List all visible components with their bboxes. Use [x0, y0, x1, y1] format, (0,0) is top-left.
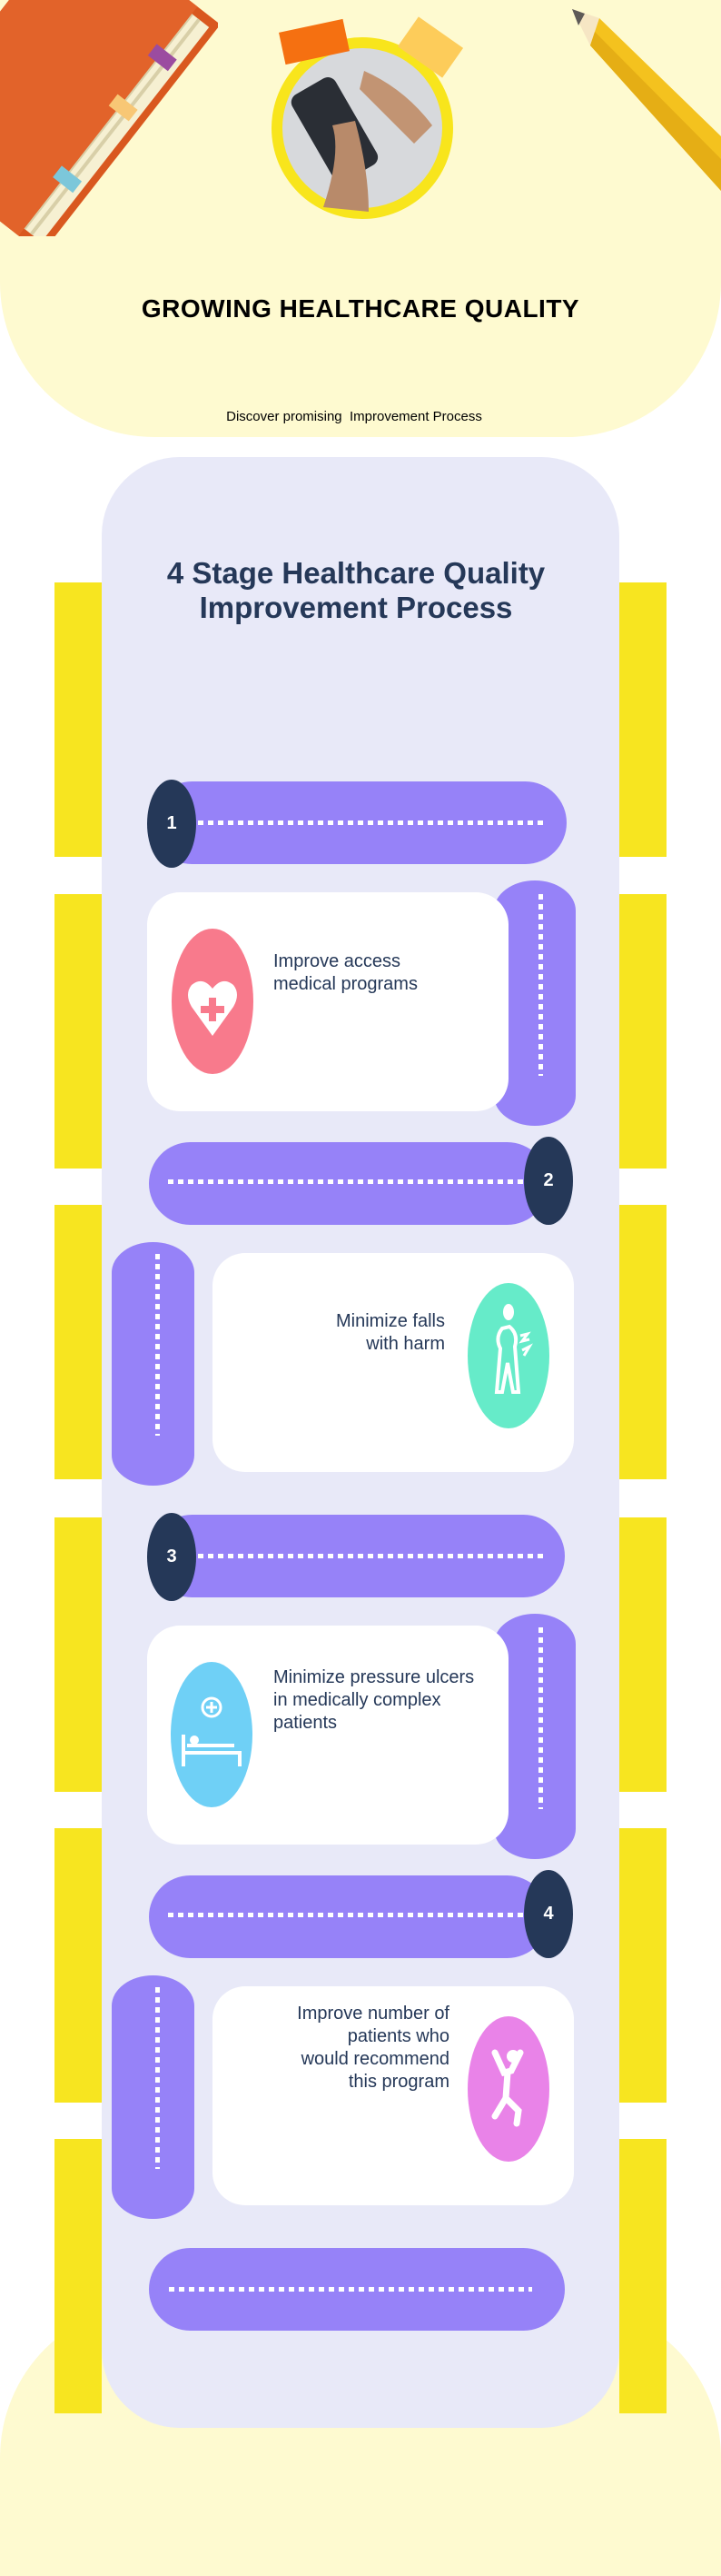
text 3: in medically complex [273, 1690, 441, 1710]
number 3 [147, 1513, 196, 1601]
icon: hurt person [468, 1283, 549, 1428]
card 2 [212, 1253, 574, 1472]
card 1 [147, 892, 509, 1111]
text 4: this program [349, 2072, 449, 2092]
footer background [0, 2303, 721, 2576]
tape pieces [279, 19, 350, 65]
bar 2 [149, 1142, 548, 1225]
panel heading [167, 556, 545, 624]
bar 4 [149, 1875, 548, 1958]
number 1 [147, 780, 196, 868]
stage 3 [147, 1513, 576, 1859]
capsule right [494, 1614, 576, 1859]
number 2: 2 [543, 1170, 554, 1190]
text 3 [273, 1667, 474, 1733]
stage 2 [112, 1137, 574, 1486]
text 1: Improve access [273, 951, 400, 971]
text 2 [336, 1311, 445, 1354]
text 1 [273, 951, 418, 994]
card 4 [212, 1986, 574, 2205]
illustration: pencil [572, 9, 721, 191]
text 2: Minimize falls [336, 1311, 445, 1331]
title: GROWING HEALTHCARE QUALITY [142, 294, 579, 323]
number 4: 4 [543, 1904, 554, 1924]
card 3 [147, 1626, 509, 1845]
number 3: 3 [166, 1547, 177, 1566]
text 4 [297, 2004, 449, 2092]
final bar [149, 2248, 565, 2331]
text 3: Minimize pressure ulcers [273, 1667, 474, 1687]
illustration: photo circle [272, 37, 453, 219]
number 1: 1 [166, 813, 177, 833]
bar 1 [151, 781, 567, 864]
capsule left [112, 1975, 194, 2219]
icon: heart [172, 929, 253, 1074]
subtitle: Discover promising Improvement Process [226, 409, 482, 424]
text 1: medical programs [273, 974, 418, 994]
text 4: Improve number of [297, 2004, 449, 2024]
capsule left [112, 1242, 194, 1486]
panel: process [102, 457, 619, 2428]
text 3: patients [273, 1713, 337, 1733]
text 2: with harm [366, 1334, 445, 1354]
icon: patient bed [171, 1662, 252, 1807]
icon: happy person [468, 2016, 549, 2162]
bar 3 [151, 1515, 565, 1597]
stage 1 [147, 780, 576, 1126]
illustration: book [0, 0, 218, 236]
number 2 [524, 1137, 573, 1225]
number 4 [524, 1870, 573, 1958]
text 4: patients who [348, 2026, 449, 2046]
text 4: would recommend [301, 2049, 449, 2069]
header background [0, 0, 721, 437]
panel heading: 4 Stage Healthcare Quality [167, 556, 545, 590]
stage 4 [112, 1870, 574, 2219]
panel heading: Improvement Process [200, 591, 512, 624]
yellow side bars [54, 582, 667, 2413]
capsule right [494, 880, 576, 1126]
